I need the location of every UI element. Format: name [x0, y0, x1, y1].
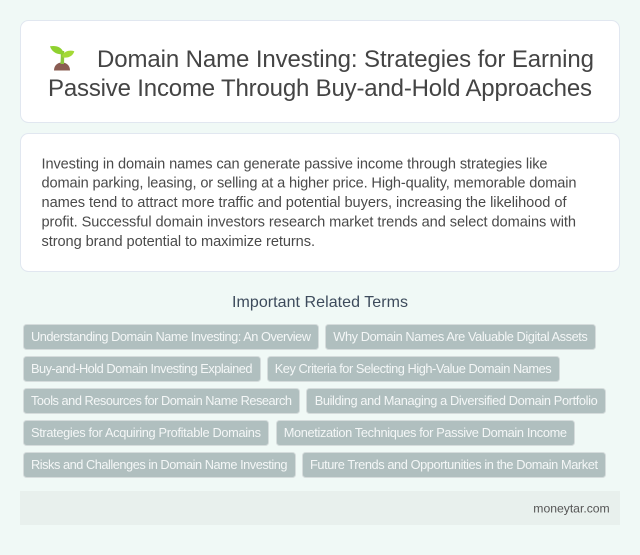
text block: summary paragraph	[42, 156, 576, 250]
tag: key criteria	[268, 356, 560, 382]
tag: overview: Understanding Domain Name Investing: An Overview	[31, 329, 312, 344]
tag: buy and hold: Buy-and-Hold Domain Investing Explained	[31, 361, 252, 376]
text block: summary paragraph: strong brand potential to maximize returns.	[42, 234, 315, 250]
text block: summary paragraph: names tend to attract more traffic and potential buyers, increasing the likelihood of	[42, 195, 567, 211]
title: Domain Name Investing: Strategies for Earning	[97, 46, 594, 73]
heading: related terms: Important Related Terms	[232, 294, 408, 311]
title	[48, 46, 594, 102]
icon: sprout	[50, 46, 74, 70]
tag: risks	[24, 452, 296, 478]
text block: summary paragraph: domain parking, leasing, or selling at a higher price. High-quality, memorable domain	[42, 176, 576, 192]
text block: summary paragraph: Investing in domain names can generate passive income through strategies like	[42, 156, 548, 172]
tag: monetization: Monetization Techniques for Passive Domain Income	[284, 425, 567, 440]
tag: acquiring	[24, 420, 268, 446]
footer text: source: moneytar.com	[533, 501, 610, 515]
tag: valuable assets: Why Domain Names Are Valuable Digital Assets	[333, 329, 588, 344]
tag: acquiring: Strategies for Acquiring Profitable Domains	[31, 425, 261, 440]
tag: portfolio: Building and Managing a Diversified Domain Portfolio	[315, 393, 598, 408]
text block: summary paragraph: profit. Successful domain investors research market trends and select domains with	[42, 214, 576, 230]
tag list	[24, 324, 606, 478]
title: Passive Income Through Buy-and-Hold Approaches	[48, 75, 592, 102]
tag: risks: Risks and Challenges in Domain Name Investing	[31, 457, 288, 472]
panel: title card	[20, 20, 620, 122]
tag: key criteria: Key Criteria for Selecting High-Value Domain Names	[275, 361, 552, 376]
footer bar	[20, 491, 620, 525]
tag: portfolio	[306, 388, 606, 414]
tag: buy and hold	[24, 356, 260, 382]
tag: tools: Tools and Resources for Domain Name Research	[31, 393, 292, 408]
tag: future trends: Future Trends and Opportunities in the Domain Market	[310, 457, 598, 472]
tag: tools	[24, 388, 300, 414]
tag: overview	[24, 324, 318, 350]
tag: future trends	[302, 452, 606, 478]
panel: summary	[20, 134, 620, 272]
tag: valuable assets	[326, 324, 596, 350]
tag: monetization	[276, 420, 574, 446]
